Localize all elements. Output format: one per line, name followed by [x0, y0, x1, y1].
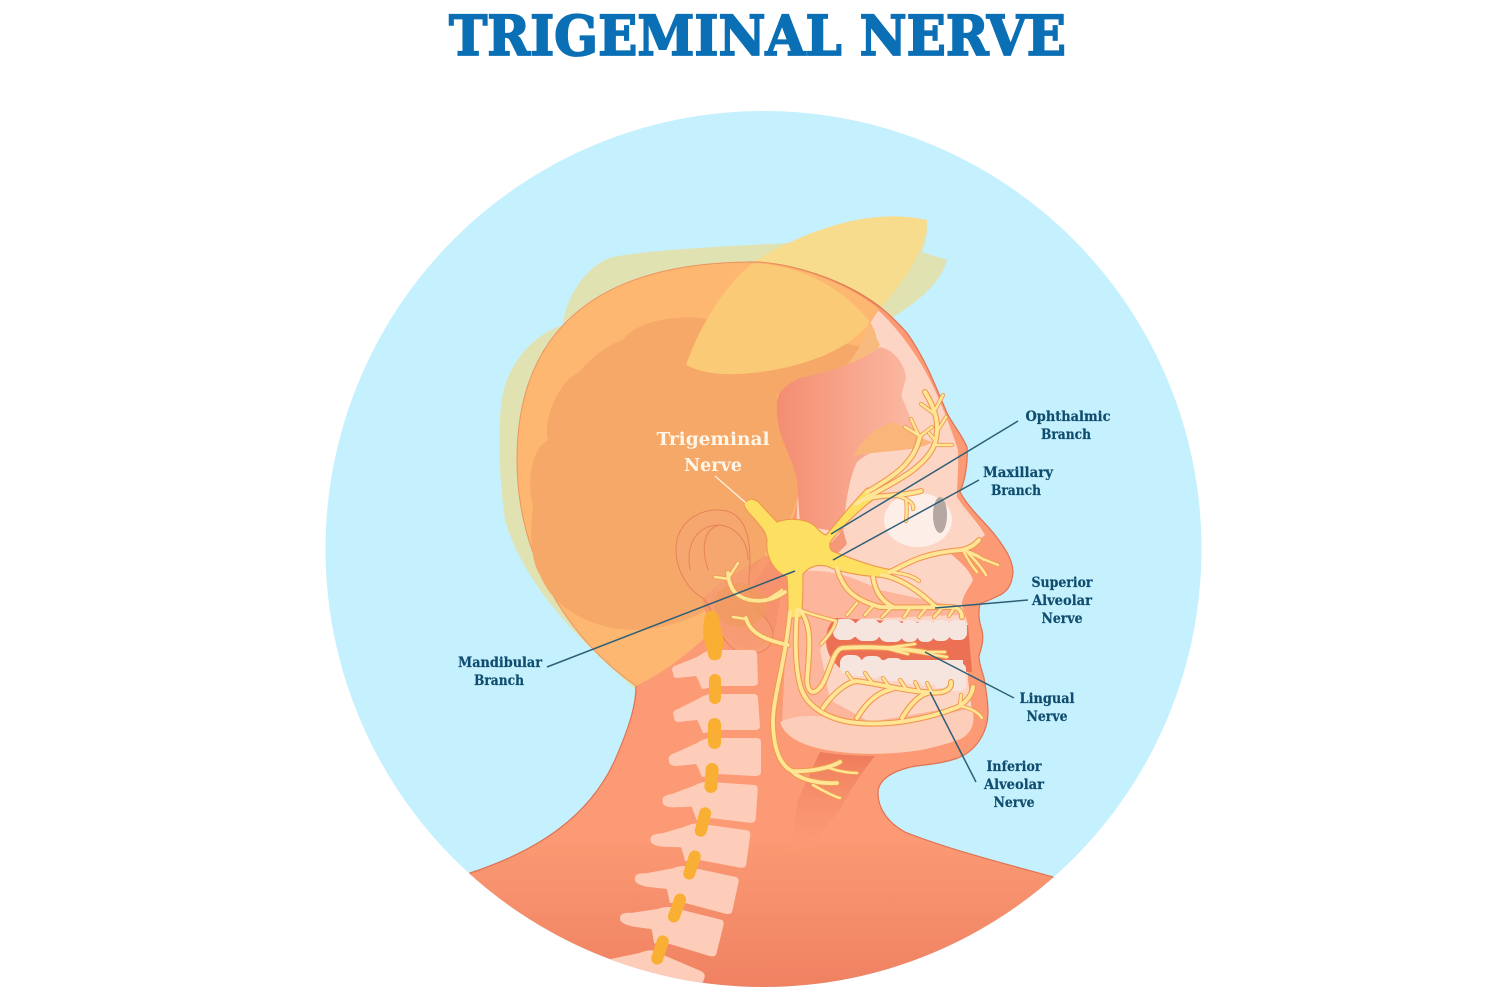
label: Maxillary Branch	[833, 465, 1054, 560]
forehead corner	[846, 322, 880, 366]
label: Ophthalmic Branch: Branch	[1041, 427, 1091, 443]
back hair silhouette	[499, 219, 947, 690]
wedge beside ganglion	[830, 530, 847, 553]
label: Inferior Alveolar Nerve	[930, 692, 1045, 811]
nerve fill twigs	[715, 395, 998, 798]
trigeminal ganglion and trunks	[744, 488, 892, 618]
nerve outline main	[728, 392, 979, 783]
cheek shade	[782, 570, 968, 721]
nasal cavity pink	[777, 347, 917, 533]
label: Superior Alveolar Nerve	[935, 575, 1093, 627]
label: Mandibular Branch: Branch	[474, 673, 524, 689]
skull edge line	[517, 262, 880, 686]
nerve network	[715, 392, 998, 798]
ear inner fold	[689, 525, 748, 570]
label: Lingual Nerve: Nerve	[1026, 709, 1068, 725]
lower teeth	[840, 655, 966, 691]
sinus	[854, 422, 932, 456]
background circle	[326, 111, 1202, 987]
label: Ophthalmic Branch: Ophthalmic	[1026, 409, 1110, 425]
spinal cord	[650, 611, 724, 966]
label: Inferior Alveolar Nerve: Nerve	[994, 795, 1034, 811]
label: Mandibular Branch: Mandibular	[458, 655, 543, 671]
yellow hair patch	[686, 263, 870, 374]
label: Trigeminal Nerve: Nerve	[684, 456, 742, 476]
label: Trigeminal Nerve: Trigeminal	[656, 430, 770, 450]
label: Superior Alveolar Nerve: Nerve	[1042, 611, 1082, 627]
skin body with neck and shoulders	[469, 261, 1054, 987]
label: Superior Alveolar Nerve: Superior	[1032, 575, 1093, 591]
lower jaw bone	[780, 708, 973, 754]
label: Superior Alveolar Nerve: Alveolar	[1031, 593, 1093, 609]
ear outline	[676, 510, 773, 654]
label: Mandibular Branch	[458, 571, 795, 689]
mouth cavity	[826, 618, 972, 672]
label: Inferior Alveolar Nerve: Inferior	[986, 759, 1042, 775]
nerve fill main	[728, 392, 979, 783]
eye socket	[884, 493, 952, 547]
ear canal	[714, 583, 766, 627]
pale face layer	[782, 310, 985, 753]
label: Lingual Nerve: Lingual	[1020, 691, 1074, 707]
head orange cap	[517, 262, 880, 686]
label: Maxillary Branch: Branch	[991, 483, 1041, 499]
front hair tip	[753, 216, 927, 309]
eye	[933, 497, 947, 533]
vertebrae	[603, 650, 761, 1000]
upper teeth	[833, 619, 967, 642]
throat shading	[798, 752, 875, 806]
label: Inferior Alveolar Nerve: Alveolar	[983, 777, 1045, 793]
nerve outline twigs	[715, 395, 998, 798]
label: Lingual Nerve	[925, 652, 1074, 725]
ear shadow	[703, 555, 774, 631]
label: Ophthalmic Branch	[831, 409, 1110, 534]
head and neck illustration	[469, 216, 1054, 987]
infographic canvas	[326, 13, 1202, 987]
brain	[530, 317, 880, 630]
ear	[676, 510, 774, 654]
label: Maxillary Branch: Maxillary	[983, 465, 1054, 481]
title: TRIGEMINAL NERVE	[449, 3, 1066, 68]
label: Trigeminal Nerve	[656, 430, 770, 503]
